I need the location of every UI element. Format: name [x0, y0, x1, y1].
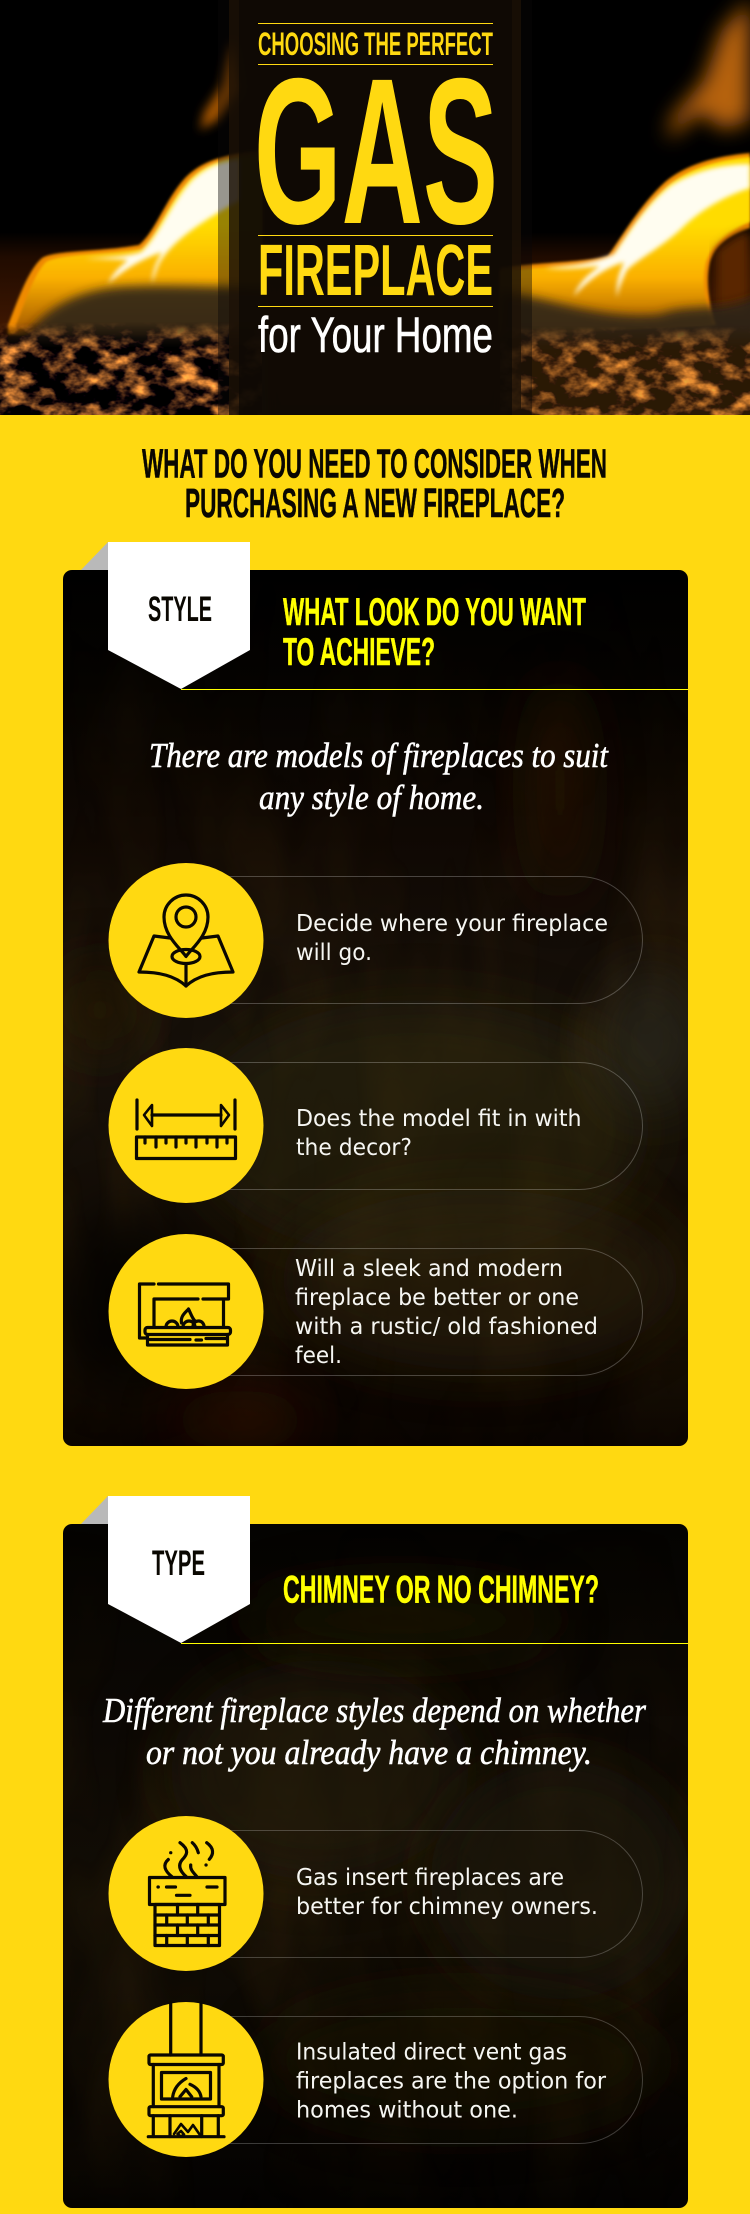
icon circle	[108, 1048, 264, 1203]
hero: fireplace flame photo with title	[0, 0, 750, 420]
title rule 1	[258, 23, 493, 24]
script intro: or not you already have a chimney.	[146, 1733, 592, 1772]
icon circle	[108, 1816, 264, 1971]
item text: Does the model fit in with	[296, 1104, 582, 1132]
coals, left	[8, 278, 239, 338]
coal texture, right	[512, 328, 750, 415]
pill	[120, 1062, 642, 1190]
panel: style	[60, 542, 700, 1450]
item: modern or rustic	[108, 1234, 642, 1389]
pill	[120, 2016, 642, 2144]
panel background	[63, 1524, 690, 2208]
title rule 2	[258, 64, 493, 65]
title word: FIREPLACE: FIREPLACE	[258, 231, 493, 311]
pill	[120, 1830, 642, 1958]
item: location	[108, 863, 642, 1018]
panel: type	[63, 1496, 690, 2208]
item text: will go.	[296, 938, 372, 966]
blurred distant flame left	[200, 40, 240, 130]
tab label: TYPE	[152, 1544, 205, 1583]
title rule 4	[258, 306, 493, 307]
icon: modern fireplace	[140, 1284, 230, 1345]
title line: for your home: for Your Home	[258, 307, 493, 363]
header rule	[181, 689, 688, 690]
item text	[296, 1863, 598, 1920]
item text: the decor?	[296, 1133, 412, 1161]
title rule 3	[258, 235, 493, 236]
item text: homes without one.	[296, 2096, 518, 2124]
icon: direct vent stove	[148, 2003, 224, 2137]
script intro	[102, 1691, 646, 1772]
coals, right	[512, 288, 750, 340]
blurred distant flame right	[668, 0, 750, 140]
pill	[120, 1248, 642, 1376]
title line: choosing the perfect: CHOOSING THE PERFECT	[258, 26, 493, 62]
item: decor	[108, 1048, 642, 1203]
tab fold	[81, 542, 108, 570]
coal texture, left	[0, 323, 239, 415]
panel heading: TO ACHIEVE?	[283, 631, 435, 674]
script intro: any style of home.	[259, 778, 484, 817]
title band: middle strip	[229, 0, 521, 415]
item text: better for chimney owners.	[296, 1892, 598, 1920]
item text: fireplace be better or one	[295, 1283, 579, 1311]
left flame	[8, 150, 262, 335]
icon: brick chimney with smoke	[150, 1843, 225, 1946]
icon circle	[108, 2002, 264, 2157]
item text: fireplaces are the option for	[296, 2066, 606, 2094]
main question heading	[142, 440, 607, 526]
tab: STYLE	[108, 542, 250, 689]
item text: Decide where your fireplace	[296, 909, 608, 937]
tab label: STYLE	[148, 590, 212, 629]
title band: inner strip	[239, 0, 512, 415]
icon: ruler with width arrow	[136, 1100, 236, 1158]
item text: with a rustic/ old fashioned	[295, 1312, 598, 1340]
item text: Will a sleek and modern	[295, 1254, 563, 1282]
item text	[296, 909, 608, 966]
tab: TYPE	[108, 1496, 250, 1643]
tab fold	[81, 1496, 108, 1524]
icon: map with pin	[139, 895, 233, 986]
script intro	[149, 736, 609, 817]
icon circle	[108, 863, 264, 1018]
hero backdrop	[0, 0, 750, 344]
title word: GAS: GAS	[254, 36, 498, 268]
pill	[120, 876, 642, 1004]
right flame	[500, 153, 750, 335]
item text	[295, 1254, 598, 1369]
header rule	[181, 1643, 688, 1644]
item text	[296, 1104, 582, 1161]
title block	[254, 23, 498, 363]
panel background	[60, 570, 700, 1450]
title band: outer translucent strip	[218, 47, 532, 415]
item: chimney owners	[108, 1816, 642, 1971]
item text	[296, 2038, 606, 2124]
item text: Insulated direct vent gas	[296, 2038, 567, 2066]
item text: feel.	[295, 1341, 342, 1369]
item text: Gas insert fireplaces are	[296, 1863, 564, 1891]
icon circle	[108, 1234, 264, 1389]
item: no chimney	[108, 2002, 642, 2157]
panel heading	[283, 591, 586, 674]
script intro: There are models of fireplaces to suit	[149, 736, 609, 775]
script intro: Different fireplace styles depend on whether	[102, 1691, 646, 1730]
